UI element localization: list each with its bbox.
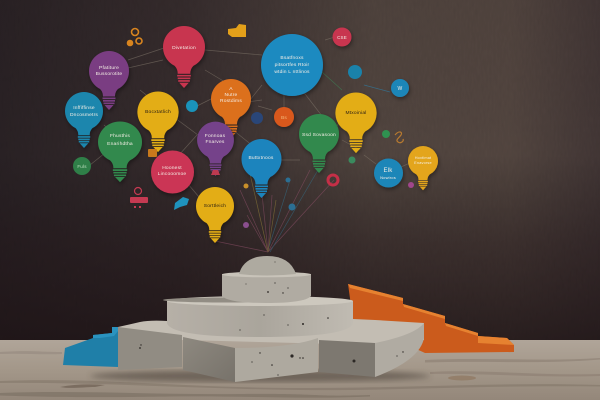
bulb: red top: Divetation xyxy=(172,45,196,51)
icon: red person xyxy=(130,188,148,208)
concrete speckles xyxy=(139,262,404,376)
blue stairs xyxy=(63,327,118,367)
bulb: blue centre xyxy=(242,139,282,198)
icon: green dot xyxy=(382,130,390,138)
bulb: blue left: Inffiffinse xyxy=(73,105,95,111)
bulb: blue left xyxy=(65,92,103,148)
icon: blue pointer xyxy=(174,197,189,210)
top cylinder xyxy=(222,272,311,303)
icon: green node left xyxy=(73,157,91,175)
icon: small red bulb xyxy=(211,170,220,175)
bulb: blue left: Dncosmetrs xyxy=(70,112,98,118)
circle: blue right: Elk xyxy=(384,168,393,174)
bulb: orange centre xyxy=(211,79,251,138)
icon: green node left: Fuls xyxy=(77,164,87,169)
lower tier top surface xyxy=(118,319,424,345)
icon: magenta dot xyxy=(408,182,414,188)
bulb: orange centre: Rostdims xyxy=(220,98,242,104)
bulb: blue centre: Buttxtnoos xyxy=(248,155,274,161)
icon: red badge xyxy=(332,28,352,46)
icon: orange hand xyxy=(228,24,246,37)
bulb: small yellow right: Enavorse xyxy=(414,161,432,165)
circle: large blue: pitsortfes Rtoir xyxy=(275,62,310,68)
bulb: orange centre: Nutre xyxy=(225,92,238,98)
icon: orange splash: Bs xyxy=(281,115,287,121)
shadow under pedestal xyxy=(90,370,430,382)
right block faces xyxy=(319,323,424,377)
bulb: yellow bottom: Sorttleich xyxy=(204,203,226,209)
bulb: green left: Enarihdtha xyxy=(107,141,133,147)
concrete pedestal xyxy=(118,256,424,382)
bulb: red top xyxy=(163,26,205,88)
circle: large blue xyxy=(261,34,323,96)
bulb: small yellow right xyxy=(408,146,438,190)
orange stairs xyxy=(348,284,514,353)
bulb: orange centre: A xyxy=(229,86,233,92)
left block xyxy=(118,327,182,370)
bulb: purple centre: Fonnoas xyxy=(205,133,226,139)
icon: teal node xyxy=(186,100,198,112)
icon: orange small square xyxy=(148,149,157,157)
circle: large blue: Bsatfnoxs xyxy=(280,55,304,61)
icon: red swirl xyxy=(328,175,338,185)
middle cylinder xyxy=(163,296,353,337)
bulb: green left: Fhusthis xyxy=(110,133,130,139)
bulb: yellow right xyxy=(335,92,377,153)
icon: small blue node xyxy=(348,65,362,79)
bulb: purple centre xyxy=(197,122,234,176)
bulb: small yellow right: Hoxtimat xyxy=(415,156,432,160)
icon: orange gears xyxy=(128,28,142,46)
bulb: purple centre: Fnarves xyxy=(205,139,225,145)
icon: navy node xyxy=(251,112,263,124)
circle: large blue: wtdin L nttlinos xyxy=(274,69,310,75)
circle: red middle: Hoonest xyxy=(162,165,182,171)
bulb: green centre: Ssd Sovasoon xyxy=(302,132,336,138)
bulb: yellow left: Bocxtatlich xyxy=(145,109,171,115)
icon: orange splash xyxy=(274,107,294,127)
bulb: yellow bottom xyxy=(196,187,234,243)
wooden floor xyxy=(0,340,600,400)
bulb: green left xyxy=(98,121,142,182)
icon: amber dot xyxy=(244,184,248,188)
icon: blue dots on lines xyxy=(286,178,296,210)
icon: red badge: CSE xyxy=(337,35,347,40)
icon: blue wifi node xyxy=(391,79,409,97)
bulb: purple top left: Bussorotite xyxy=(96,71,122,77)
circle: blue right xyxy=(374,158,403,188)
bulb: purple top left xyxy=(89,51,129,110)
bulb: yellow left xyxy=(137,91,179,152)
icon: green leaf node xyxy=(348,156,356,164)
dome xyxy=(239,256,296,276)
circle: blue right: Nowiros xyxy=(380,175,396,180)
connecting lines xyxy=(85,36,412,252)
icon: blue wifi node: W xyxy=(398,86,403,92)
center block front faces xyxy=(183,337,318,382)
bulb: green centre xyxy=(299,114,339,173)
circle: red middle xyxy=(151,150,194,194)
icon: purple dot on line xyxy=(243,222,249,228)
circle: red middle: Lincooomoe xyxy=(158,171,186,177)
icon: orange loop xyxy=(395,132,403,143)
bulb: yellow right: Mtxoinial xyxy=(345,110,367,116)
bulb: purple top left: Pfatiture xyxy=(99,65,119,71)
